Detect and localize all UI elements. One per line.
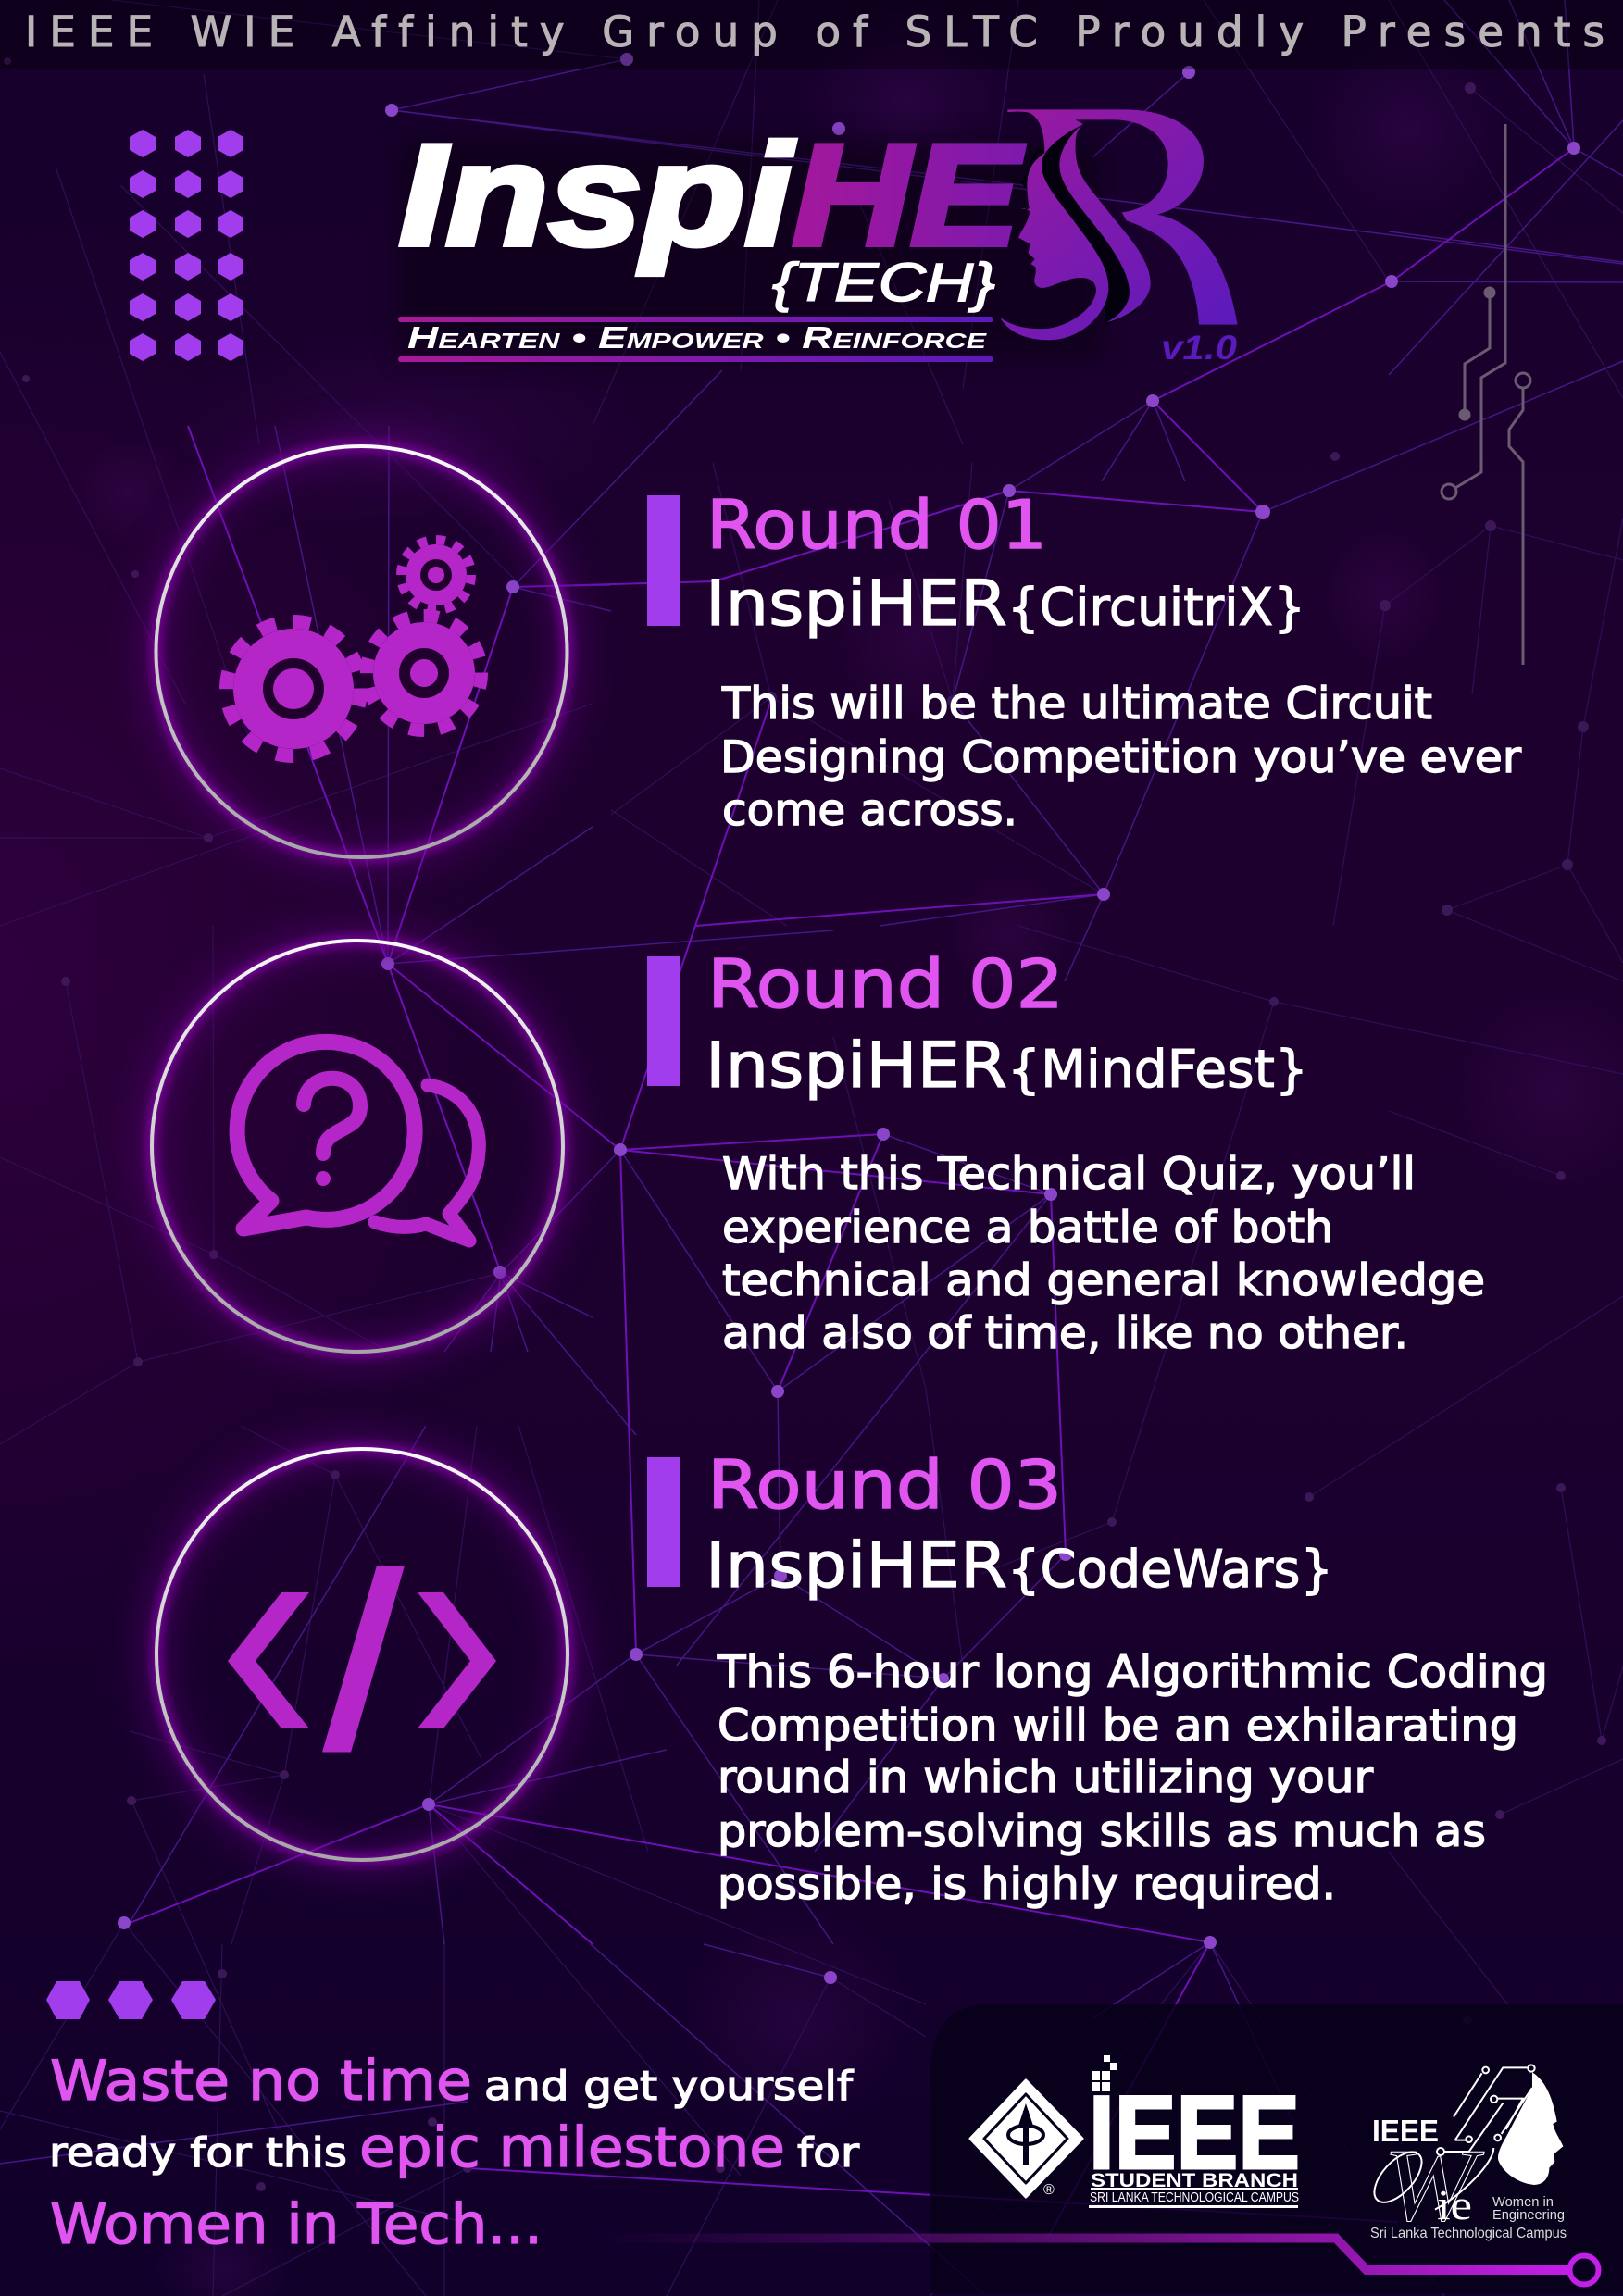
tagline: Hearten • Empower • Reinforce	[407, 320, 987, 355]
closing message: Waste no time	[50, 2049, 472, 2114]
description: This 6-hour long Algorithmic Coding	[717, 1647, 1548, 1698]
header text: IEEE WIE Affinity Group of SLTC Proudly Presents	[25, 7, 1604, 56]
closing message: Women in Tech...	[50, 2192, 543, 2257]
women in engineering: Women in	[1492, 2194, 1554, 2210]
description: possible, is highly required.	[718, 1859, 1336, 1910]
logo R with woman's profile	[1000, 109, 1238, 340]
IEEE diamond emblem	[970, 2080, 1082, 2198]
hexagon trio	[46, 1981, 216, 2019]
panel: round 02	[150, 939, 1485, 1359]
round name: InspiHER	[705, 568, 1007, 641]
round name suffix: {CircuitriX}	[1007, 578, 1305, 638]
IEEE: IEEE	[1372, 2114, 1439, 2148]
tagline lower rule	[398, 356, 993, 362]
description	[717, 1647, 1548, 1910]
Wie script: W	[1383, 2128, 1484, 2243]
round label: Round 03	[707, 1446, 1062, 1524]
round name suffix: {CodeWars}	[1007, 1540, 1333, 1600]
logo panel background	[930, 2004, 1623, 2293]
description: Designing Competition you’ve ever	[720, 732, 1522, 783]
logo: IEEE student branch	[970, 2055, 1300, 2208]
panel: round 03	[155, 1446, 1548, 1910]
logo: IEEE WIE: ie	[1437, 2181, 1472, 2228]
closing message: for	[797, 2129, 860, 2177]
logo: IEEE WIE: Engineering	[1492, 2207, 1565, 2223]
sri lanka technological campus: Sri Lanka Technological Campus	[1370, 2226, 1567, 2241]
round name: InspiHER	[705, 1529, 1007, 1603]
description	[720, 679, 1522, 836]
description: technical and general knowledge	[722, 1255, 1485, 1306]
IEEE diamond emblem: ®	[1043, 2182, 1055, 2198]
circle with code icon	[155, 1447, 569, 1862]
student branch: STUDENT BRANCH	[1091, 2170, 1298, 2191]
description: With this Technical Quiz, you’ll	[722, 1149, 1416, 1200]
description: come across.	[722, 785, 1017, 836]
hexagon dot grid	[130, 130, 243, 361]
closing message	[49, 2049, 860, 2257]
accent bar	[647, 1457, 680, 1587]
logo word Inspi: Inspi	[399, 115, 794, 275]
header band	[0, 0, 1623, 69]
icon: gears	[226, 540, 481, 755]
pixel squares	[1092, 2055, 1117, 2091]
description	[722, 1149, 1485, 1359]
trace end ring	[1570, 2255, 1598, 2285]
description: round in which utilizing your	[718, 1753, 1374, 1803]
closing message: epic milestone	[359, 2115, 785, 2180]
closing message: and get yourself	[484, 2063, 855, 2110]
icon: code brackets	[228, 1566, 496, 1752]
accent bar	[647, 495, 680, 626]
logo: InspiHER {TECH}	[398, 109, 1238, 367]
accent bar	[647, 956, 680, 1086]
version label: v1.0	[1161, 329, 1237, 367]
circle with gears icon	[154, 444, 568, 859]
icon: question speech bubbles	[237, 1042, 479, 1241]
description: and also of time, like no other.	[722, 1308, 1408, 1359]
logo: IEEE WIE	[1366, 2065, 1567, 2243]
closing message: ready for this	[49, 2129, 347, 2177]
round name suffix: {MindFest}	[1007, 1040, 1308, 1100]
panel: round 01	[154, 444, 1522, 859]
tagline upper rule	[398, 317, 993, 322]
description: problem-solving skills as much as	[718, 1806, 1486, 1857]
round label: Round 01	[706, 486, 1047, 564]
circle with chat icon	[150, 939, 565, 1354]
logo {TECH}: {TECH}	[772, 253, 995, 313]
round label: Round 02	[707, 945, 1064, 1023]
description: Competition will be an exhilarating	[718, 1701, 1518, 1752]
description: This will be the ultimate Circuit	[721, 679, 1432, 730]
decorative circuit traces	[1442, 124, 1530, 665]
campus: SRI LANKA TECHNOLOGICAL CAMPUS	[1090, 2190, 1299, 2205]
round name: InspiHER	[705, 1029, 1007, 1103]
IEEE wordmark: IEEE	[1089, 2075, 1300, 2190]
icon: head silhouette with circuit	[1366, 2065, 1563, 2211]
logo word HE: HE	[793, 115, 1024, 275]
decorative trace with ring	[593, 2239, 1598, 2285]
description: experience a battle of both	[722, 1203, 1333, 1254]
